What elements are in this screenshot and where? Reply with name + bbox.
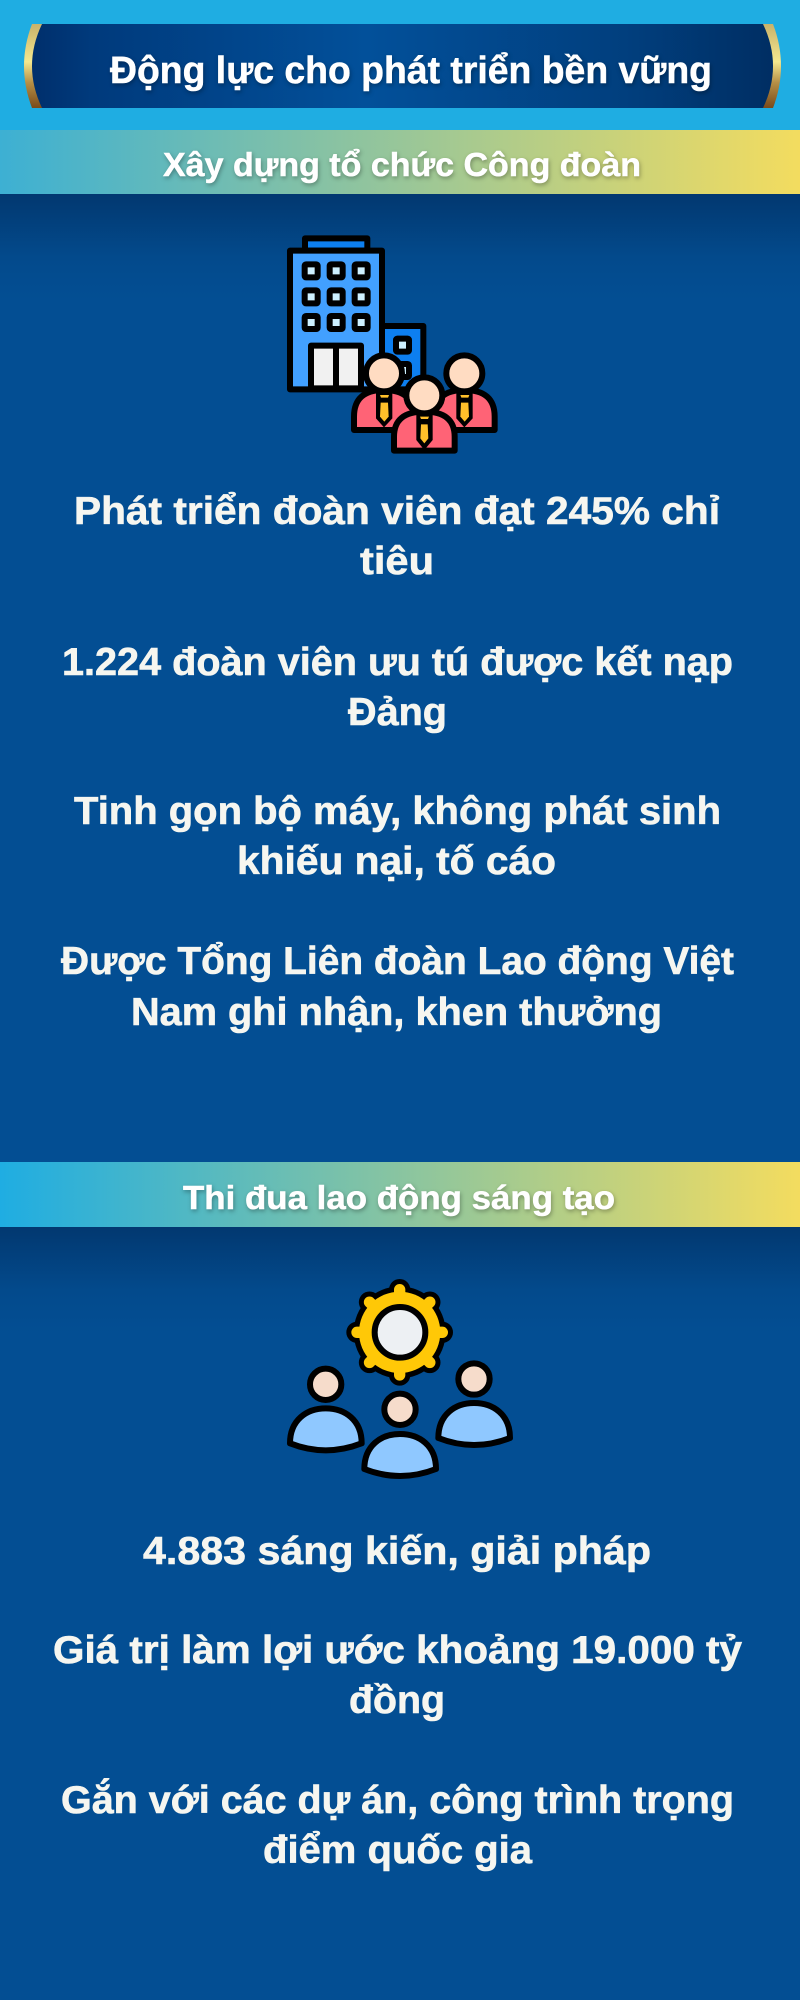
icon: gear and team: [290, 1286, 510, 1476]
text: dự án trọng điểm: [61, 1778, 734, 1872]
title: Động lực cho phát triển bền vững: [110, 50, 712, 92]
section header: Xây dựng tổ chức Công đoàn: [0, 130, 800, 194]
text: dự án trọng điểm: điểm quốc gia: [263, 1829, 532, 1872]
banner body: [32, 24, 773, 108]
text: giá trị làm lợi: Giá trị làm lợi ước khoảng 19.000 tỷ: [53, 1629, 742, 1672]
section header: Xây dựng tổ chức Công đoàn: Xây dựng tổ chức Công đoàn: [163, 146, 641, 183]
text: phát triển đoàn viên: [74, 490, 720, 583]
text: giá trị làm lợi: đồng: [349, 1679, 445, 1722]
title banner: [24, 24, 781, 108]
text: đoàn viên ưu tú: 1.224 đoàn viên ưu tú được kết nạp: [62, 641, 733, 684]
text: tinh gọn bộ máy: khiếu nại, tố cáo: [237, 840, 556, 883]
text: phát triển đoàn viên: tiêu: [360, 540, 434, 583]
panel: Thi đua lao động sáng tạo: [0, 1227, 800, 2000]
text: ghi nhận khen thưởng: [61, 940, 734, 1034]
section header: Thi đua lao động sáng tạo: Thi đua lao động sáng tạo: [183, 1179, 615, 1216]
text: sáng kiến: 4.883 sáng kiến, giải pháp: [143, 1530, 651, 1573]
text: tinh gọn bộ máy: [74, 790, 721, 883]
section header: Thi đua lao động sáng tạo: [0, 1162, 800, 1227]
panel: Xây dựng tổ chức Công đoàn: [0, 194, 800, 1162]
text: ghi nhận khen thưởng: Được Tổng Liên đoàn Lao động Việt: [61, 940, 734, 983]
text: giá trị làm lợi: [53, 1629, 742, 1722]
text: đoàn viên ưu tú: Đảng: [348, 691, 447, 734]
banner gold edges: [24, 24, 781, 108]
text: tinh gọn bộ máy: Tinh gọn bộ máy, không phát sinh: [74, 790, 721, 833]
text: phát triển đoàn viên: Phát triển đoàn viên đạt 245% chỉ: [74, 490, 720, 533]
text: ghi nhận khen thưởng: Nam ghi nhận, khen thưởng: [131, 991, 662, 1034]
text: dự án trọng điểm: Gắn với các dự án, công trình trọng: [61, 1778, 734, 1822]
icon: office building and workers: [290, 238, 495, 451]
text: đoàn viên ưu tú: [62, 641, 733, 734]
